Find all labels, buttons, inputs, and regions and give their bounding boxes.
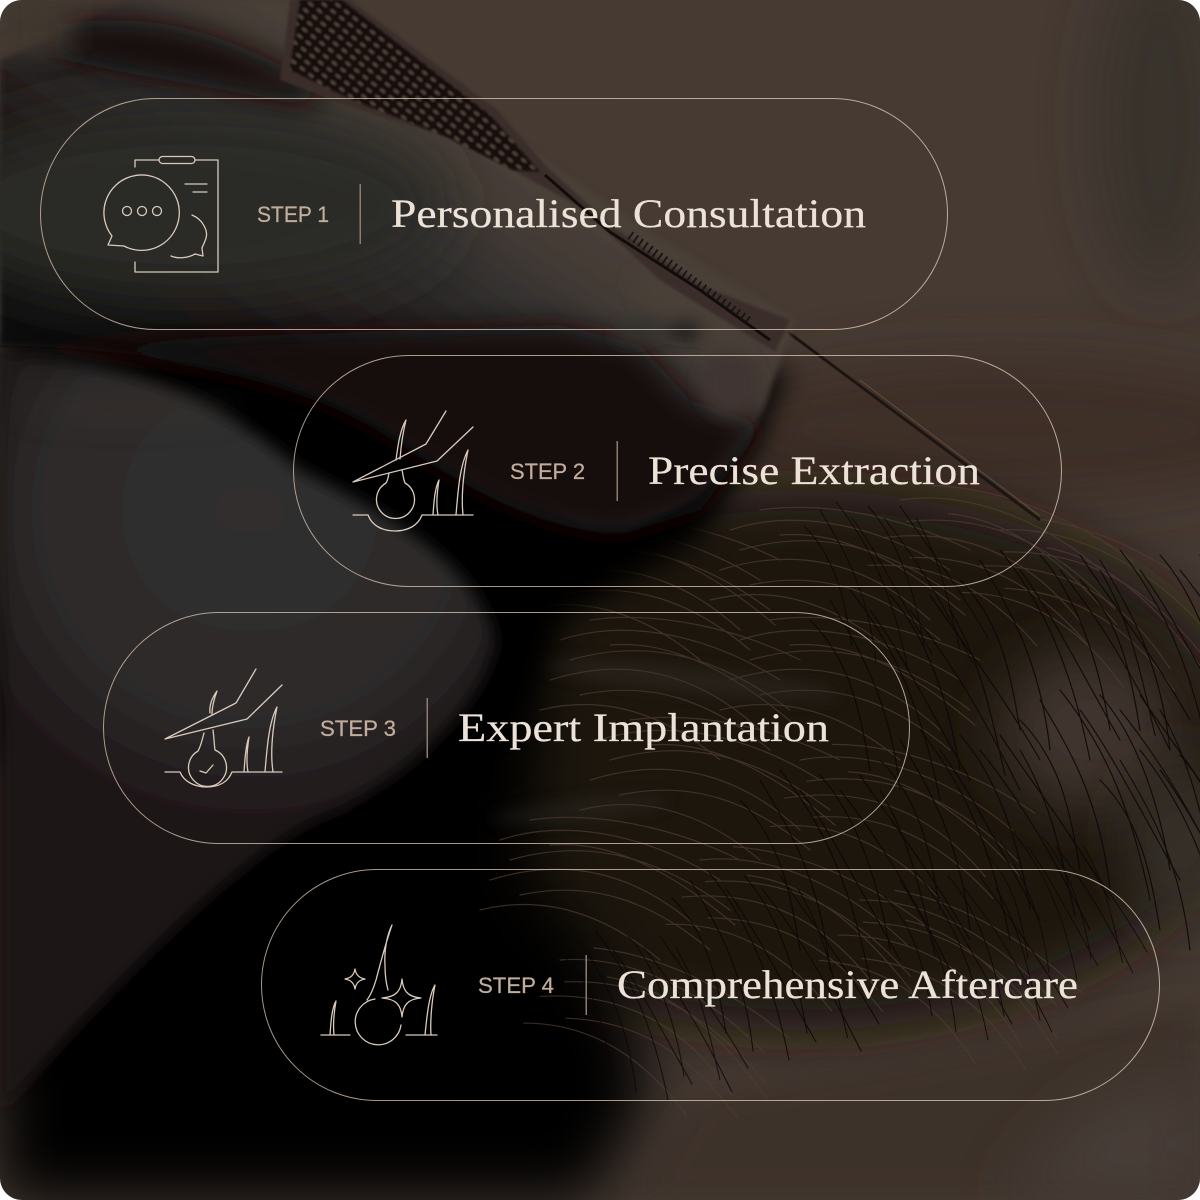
textured needle sheath bbox=[280, 0, 790, 352]
label: step 1: STEP 1 bbox=[257, 202, 329, 227]
divider: step 1 bbox=[360, 184, 361, 244]
divider: step 4 bbox=[586, 955, 587, 1015]
eyebrow hairs bbox=[480, 474, 1200, 1134]
divider: step 2 bbox=[616, 441, 618, 501]
needle shaft bbox=[785, 330, 1040, 520]
panel: step 4 comprehensive aftercare bbox=[262, 870, 1160, 1100]
heading: comprehensive aftercare: Comprehensive Aftercare bbox=[617, 962, 1078, 1007]
label: step 3: STEP 3 bbox=[320, 716, 396, 741]
panel: step 3 expert implantation bbox=[104, 612, 910, 844]
heading: personalised consultation: Personalised Consultation bbox=[391, 191, 866, 236]
heading: expert implantation: Expert Implantation bbox=[458, 705, 829, 750]
panel: step 2 precise extraction bbox=[294, 356, 1062, 586]
label: step 4: STEP 4 bbox=[478, 973, 554, 998]
pill outline 3 bbox=[104, 612, 910, 844]
gloved finger, upper bbox=[0, 0, 795, 530]
fingertip highlights bbox=[615, 317, 749, 422]
shadow below the fingers bbox=[0, 600, 650, 1200]
icon: tweezers implanting follicle with check bbox=[165, 669, 282, 787]
icon: healthy hair with sparkles bbox=[321, 925, 437, 1045]
divider: step 3 bbox=[426, 698, 428, 758]
pill outline 4 bbox=[262, 870, 1160, 1100]
icon: clipboard with speech bubbles bbox=[104, 156, 218, 272]
pill outline 2 bbox=[294, 356, 1062, 586]
panel: step 1 personalised consultation bbox=[40, 98, 948, 330]
gloved finger, lower bbox=[0, 352, 495, 1112]
shadow between the fingers bbox=[0, 340, 790, 760]
pill outline 1 bbox=[40, 98, 948, 330]
label: step 2: STEP 2 bbox=[510, 459, 585, 484]
heading: precise extraction: Precise Extraction bbox=[648, 448, 980, 493]
icon: tweezers extracting follicle bbox=[353, 411, 473, 531]
